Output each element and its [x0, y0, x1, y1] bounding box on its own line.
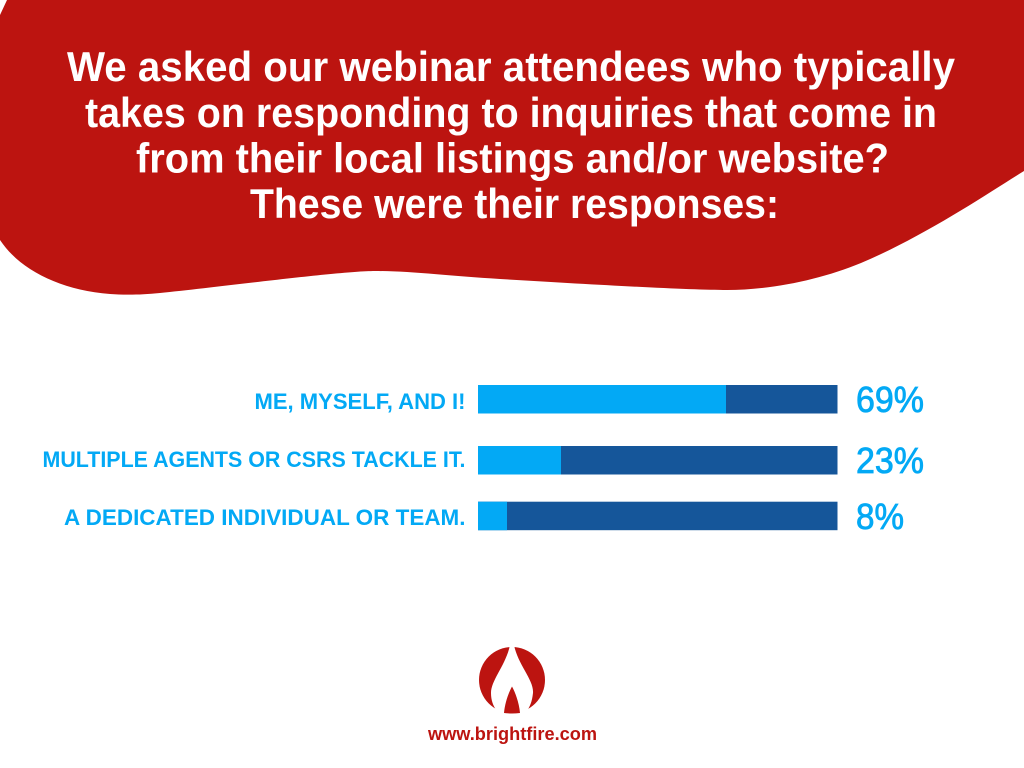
icon: BrightFire flame logo	[479, 645, 545, 716]
value: 23%: 23%	[856, 440, 924, 481]
red header blob	[0, 0, 1024, 295]
title: takes on responding to inquiries that come in	[85, 89, 937, 136]
label: multiple agents: MULTIPLE AGENTS OR CSRS TACKLE IT.	[42, 447, 466, 472]
bar: 23 percent	[478, 446, 838, 474]
row: me, myself, and I	[254, 379, 924, 420]
label: me, myself, and I: ME, MYSELF, AND I!	[254, 389, 466, 414]
title: These were their responses:	[250, 180, 779, 227]
bar: 8 percent	[478, 502, 838, 530]
row: multiple agents	[42, 440, 924, 481]
value: 8%: 8%	[856, 496, 904, 537]
bar chart	[42, 379, 924, 537]
title	[67, 43, 956, 227]
bar: 69 percent	[478, 385, 838, 414]
title: We asked our webinar attendees who typically	[67, 43, 956, 90]
value: 69%: 69%	[856, 379, 924, 420]
website url: www.brightfire.com	[427, 724, 597, 744]
label: dedicated individual: A DEDICATED INDIVIDUAL OR TEAM.	[64, 505, 466, 530]
row: dedicated individual	[64, 496, 904, 537]
title: from their local listings and/or website?	[136, 134, 889, 182]
